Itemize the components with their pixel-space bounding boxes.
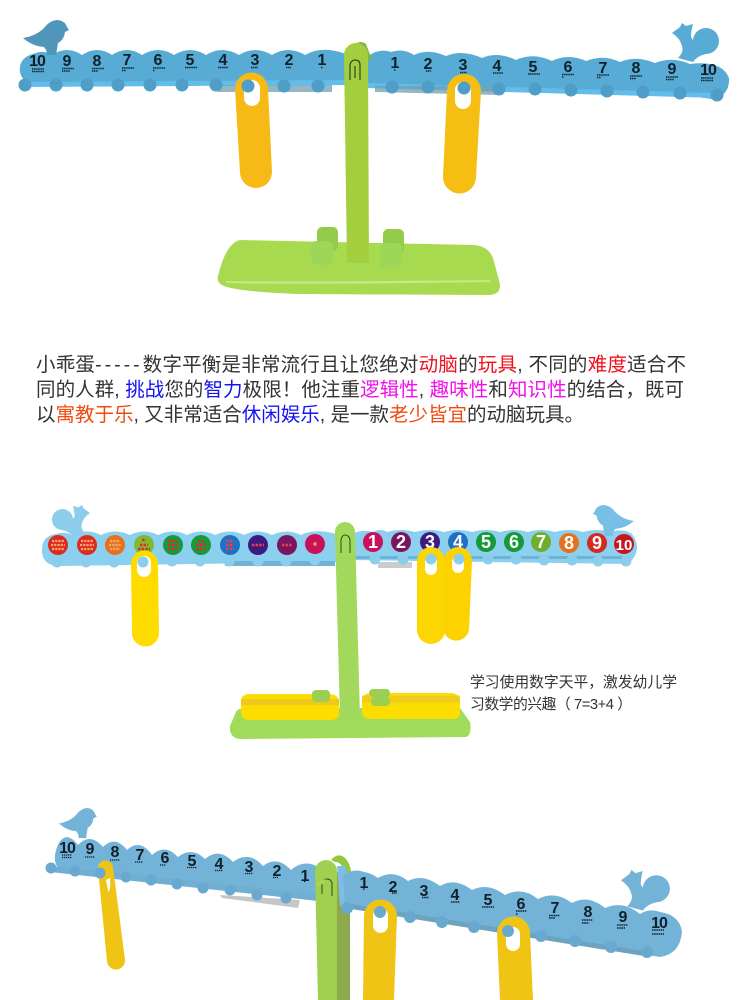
numerals right 3: 4 bbox=[451, 887, 460, 904]
yellow weights left 2 bbox=[241, 694, 339, 720]
pegs 2 bbox=[52, 554, 632, 568]
yellow weights right 2 bbox=[362, 693, 460, 719]
numerals 1: 5 bbox=[529, 59, 538, 76]
numerals right 3: 8 bbox=[584, 904, 593, 921]
base 2 bbox=[230, 708, 470, 739]
numerals 1: 10 bbox=[29, 53, 46, 70]
dot markers 1 bbox=[32, 68, 713, 80]
weight pegs 2 bbox=[312, 689, 390, 706]
bird 3 bbox=[59, 808, 97, 838]
numerals right 3: 9 bbox=[619, 909, 628, 926]
numerals right 3: 1 bbox=[360, 875, 369, 892]
numerals 1: 4 bbox=[493, 58, 502, 75]
numerals left 3: 4 bbox=[215, 856, 224, 873]
paragraph text: 以寓教于乐, 又非常适合休闲娱乐, 是一款老少皆宜的动脑玩具。 bbox=[36, 404, 584, 426]
numerals 1: 2 bbox=[285, 52, 294, 69]
numerals left 3: 5 bbox=[188, 853, 197, 870]
base highlight 1 bbox=[226, 280, 490, 284]
pegs 1 bbox=[18, 78, 724, 102]
peg rail 1 bbox=[25, 80, 717, 98]
numbered buttons right 2 bbox=[363, 532, 634, 554]
numerals left 3: 2 bbox=[273, 863, 282, 880]
post 1 bbox=[344, 42, 372, 263]
dotted buttons left 2 bbox=[48, 534, 325, 555]
numerals 1: 7 bbox=[123, 52, 132, 69]
numerals 1: 1 bbox=[318, 52, 327, 69]
yellow hanger left 3 bbox=[94, 860, 125, 970]
numerals 1: 2 bbox=[424, 56, 433, 73]
numerals 1: 9 bbox=[63, 53, 72, 70]
numbered buttons right 2: 6 bbox=[509, 532, 519, 552]
caption: 学习使用数字天平，激发幼儿学 bbox=[470, 674, 677, 691]
yellow hanger right 3 bbox=[497, 917, 533, 1000]
numerals 1: 3 bbox=[251, 52, 260, 69]
yellow hanger middle 2 bbox=[417, 547, 445, 644]
numbered buttons right 2: 7 bbox=[536, 532, 546, 552]
numerals 1: 7 bbox=[599, 60, 608, 77]
numbered buttons right 2: 4 bbox=[453, 532, 463, 552]
numbered buttons right 2: 9 bbox=[592, 533, 602, 553]
numbered buttons right 2: 3 bbox=[425, 532, 435, 552]
clips 3 bbox=[220, 895, 300, 908]
numerals right 3: 10 bbox=[651, 915, 668, 932]
numerals right 3 bbox=[360, 875, 668, 932]
balance 1: number balance with black numerals bbox=[18, 20, 729, 295]
rail left 3 bbox=[50, 866, 318, 901]
numerals right 3: 2 bbox=[389, 879, 398, 896]
rail shadow 2 bbox=[225, 556, 630, 566]
numerals right 3: 6 bbox=[517, 896, 526, 913]
numerals left 3: 8 bbox=[111, 844, 120, 861]
numerals 1: 6 bbox=[564, 59, 573, 76]
numerals right 3: 5 bbox=[484, 892, 493, 909]
numerals left 3 bbox=[59, 840, 310, 885]
beam left 2 bbox=[42, 531, 336, 566]
yellow hanger right 2 bbox=[444, 547, 472, 641]
numerals left 3: 9 bbox=[86, 841, 95, 858]
pegs right 3 bbox=[341, 902, 653, 958]
clips 2 bbox=[378, 562, 412, 568]
beam right 1 bbox=[368, 51, 729, 99]
base pegs 1 bbox=[311, 227, 404, 268]
yellow hanger right 1 bbox=[443, 74, 481, 194]
connector 3 bbox=[337, 866, 346, 908]
yellow hanger middle 3 bbox=[363, 900, 397, 1000]
numbered buttons right 2: 1 bbox=[368, 532, 378, 552]
shadow rail 1 bbox=[218, 85, 498, 95]
numerals 1: 8 bbox=[93, 53, 102, 70]
dot markers right 3 bbox=[363, 889, 664, 934]
numerals 1: 1 bbox=[391, 55, 400, 72]
base 1 bbox=[218, 240, 500, 295]
numbered buttons right 2: 8 bbox=[564, 533, 574, 553]
numerals 1: 4 bbox=[219, 52, 228, 69]
paragraph text bbox=[36, 354, 686, 426]
post 2 bbox=[335, 522, 360, 717]
numerals 1 bbox=[29, 52, 717, 79]
balance 3: tilted number balance bbox=[46, 808, 682, 1000]
paragraph text: 小乖蛋-----数字平衡是非常流行且让您绝对动脑的玩具, 不同的难度适合不 bbox=[36, 354, 686, 376]
numerals right 3: 3 bbox=[420, 883, 429, 900]
beam left 3 bbox=[55, 837, 322, 898]
yellow hanger left 1 bbox=[235, 73, 272, 188]
caption bbox=[470, 674, 677, 713]
post 3 bbox=[315, 860, 350, 1000]
squirrel 1 bbox=[672, 23, 719, 62]
numerals left 3: 3 bbox=[245, 859, 254, 876]
numerals left 3: 1 bbox=[301, 868, 310, 885]
beam right 2 bbox=[352, 530, 637, 564]
caption: 习数学的兴趣（ 7=3+4 ） bbox=[470, 696, 632, 713]
numerals right 3: 7 bbox=[551, 900, 560, 917]
numbered buttons right 2: 2 bbox=[396, 532, 406, 552]
beam right 3 bbox=[343, 871, 682, 957]
rail right 3 bbox=[345, 903, 650, 957]
bird 1 bbox=[23, 20, 69, 55]
beam left 1 bbox=[20, 50, 346, 84]
paragraph text: 同的人群, 挑战您的智力极限！他注重逻辑性, 趣味性和知识性的结合，既可 bbox=[36, 379, 684, 401]
pegs left 3 bbox=[46, 862, 292, 904]
numbered buttons right 2: 5 bbox=[481, 532, 491, 552]
numbered buttons right 2: 10 bbox=[616, 537, 632, 554]
numerals 1: 6 bbox=[154, 52, 163, 69]
numerals 1: 8 bbox=[632, 60, 641, 77]
squirrel 3 bbox=[621, 870, 670, 911]
numerals 1: 5 bbox=[186, 52, 195, 69]
numerals 1: 9 bbox=[668, 61, 677, 78]
balance 2: number balance with coloured buttons bbox=[42, 505, 637, 739]
post back arc 3 bbox=[331, 855, 351, 874]
numerals left 3: 7 bbox=[136, 847, 145, 864]
numerals left 3: 6 bbox=[161, 850, 170, 867]
numerals 1: 3 bbox=[459, 57, 468, 74]
bird 2 bbox=[593, 505, 634, 536]
dot markers left 3 bbox=[62, 855, 306, 882]
squirrel 2 bbox=[52, 505, 90, 537]
numerals left 3: 10 bbox=[59, 840, 76, 857]
yellow hanger left 2 bbox=[131, 550, 159, 646]
numerals 1: 10 bbox=[700, 62, 717, 79]
